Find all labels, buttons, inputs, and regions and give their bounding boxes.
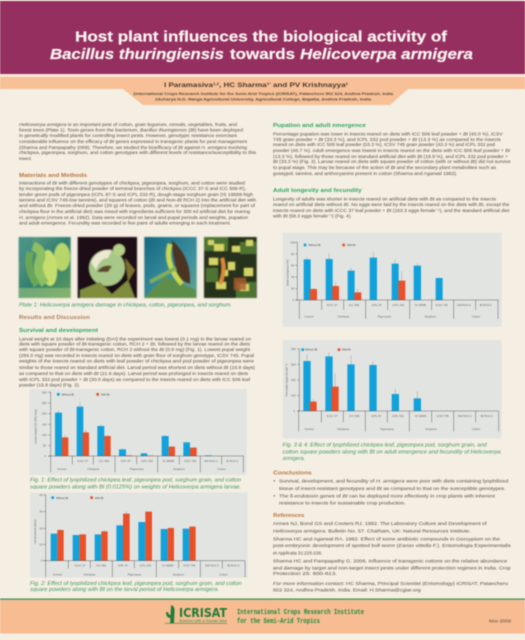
axis labels: figure 2 xyxy=(33,493,240,576)
axis labels: figure 3: 40 xyxy=(291,275,295,279)
figure 1 caption xyxy=(30,478,241,490)
axis labels: figure 4 xyxy=(284,347,493,431)
axis labels: figure 2: IS 18688 xyxy=(162,563,174,567)
survival text: with ICPL 332 pod powder + Bt (30.0 days) as compared to the insects reared on diets with ICC 506 leaf xyxy=(19,377,251,383)
tagline xyxy=(165,619,227,624)
legend: figure 4: With Bt xyxy=(342,348,351,352)
axis labels: figure 3: Pigeonpea xyxy=(378,314,392,318)
axis labels: figure 1: Bt RCH 2 xyxy=(226,459,239,463)
axis labels: figure 4: ICCC 37 xyxy=(327,414,338,418)
bars: figure 1 xyxy=(55,403,212,456)
materials and methods text: and without Bt. Freeze-dried powder (20 g) of leaves, pods, grains, or squares (replacement for part of xyxy=(19,203,256,209)
affiliations xyxy=(133,91,394,102)
tagline: Science with a human face xyxy=(179,619,227,623)
axis labels: figure 3: Control xyxy=(304,314,314,318)
legend: figure 1 xyxy=(57,392,110,396)
legend: figure 2: Without Bt xyxy=(56,496,69,500)
axis labels: figure 1: ICCC 37 xyxy=(77,459,89,463)
axis labels: figure 1: 250 xyxy=(42,401,47,405)
axis labels: figure 4: ICPL 332 xyxy=(392,414,404,418)
introduction text: in genetically modified plants for controlling insect pests. However, genotypic resistance exercises xyxy=(19,133,238,139)
authors: 1,2 xyxy=(213,82,219,86)
heading: conclusions: Conclusions xyxy=(273,470,312,476)
conclusions list: resistance to insects for sustainable crop production. xyxy=(279,500,406,506)
axis labels: figure 1: 150 xyxy=(42,422,47,426)
footer band xyxy=(0,598,525,634)
references text: et Applicata 31:225-228. xyxy=(273,550,322,556)
axis labels: figure 3 xyxy=(286,240,492,318)
survival text: weights of the insects reared on diets with leaf powder of chickpea and pod powder of pigeonpea were xyxy=(19,358,254,364)
materials and methods text: and adult emergence. Fecundity was recorded in five pairs of adults emerging in each treatment. xyxy=(19,220,231,226)
axis labels: figure 1: 50 xyxy=(43,444,46,448)
bars: figure 2 xyxy=(51,511,196,561)
chart: figure 2 larval period xyxy=(30,492,248,578)
axes and table: figure 4 xyxy=(297,349,499,432)
axis labels: figure 2: ICPL 87 xyxy=(118,563,128,567)
pupation text: Bt (33.3 %) (Fig. 3). Larvae reared on diets with square powder of cotton (with or without Bt) did not survive xyxy=(273,159,511,165)
figures 3 and 4 caption: armigera. xyxy=(283,456,305,462)
axis labels: figure 1: 300 xyxy=(42,390,47,394)
institute name: for the Semi-Arid Tropics xyxy=(237,618,320,626)
title xyxy=(50,30,473,63)
axis labels: figure 4: 100 xyxy=(291,394,296,398)
pupation text: 745 grain powder + Bt (33.3 %), and ICPL 332 pod powder + Bt (13.3 %) as compared to the insects xyxy=(273,137,501,143)
axes and table: figure 3 xyxy=(295,242,499,319)
axis labels: figure 3: IS 18688 xyxy=(415,303,426,307)
axis labels: figure 2: Control xyxy=(53,572,62,576)
survival text: powder (15.8 days) (Fig. 2). xyxy=(19,382,80,388)
survival text: (284.0 mg) was recorded in insects reared on diets with grain flour of sorghum genotype, ICSV 745. Pupal xyxy=(19,353,254,359)
axis labels: figure 4: 200 xyxy=(291,378,296,382)
figure 2 caption xyxy=(30,581,242,593)
authors: , HC Sharma xyxy=(219,82,267,89)
axis labels: figure 3: 0 xyxy=(293,298,295,302)
axis labels: figure 1: NM RCH 2 xyxy=(204,459,218,463)
axis labels: figure 2: Chickpea xyxy=(83,572,96,576)
materials and methods text xyxy=(19,180,256,226)
icon: ICRISAT plant logo xyxy=(166,605,175,623)
axis labels: figure 3: ICPL 87 xyxy=(372,303,382,307)
axis labels: figure 4: ICPL 87 xyxy=(371,414,382,418)
conclusions list: Survival, development, and fecundity of H. armigera were poor with diets containing lyophilized xyxy=(279,479,509,485)
pupation text: powder (46.7 %). Adult emergence was lowest in insects reared on the diets with ICC 506 leaf powder + Bt xyxy=(273,148,511,154)
axis labels: figure 2: ICPL 332 xyxy=(139,563,152,567)
survival text: with square powder of Bt-transgenic cotton, RCH 2 without the Bt (0.9 mg) (Fig. 1). Lowest pupal weight xyxy=(19,347,251,353)
legend: figure 4 xyxy=(301,348,351,352)
references text: Helicoverpa armigera. Bulletin No. 57. Chatham, UK: Natural Resources Institute. xyxy=(273,528,471,534)
longevity text: insects reared on diets with ICCC 37 leaf powder + Bt (153.3 eggs female⁻¹), and the standard artificial diet xyxy=(273,208,510,214)
axis labels: figure 4: Chickpea xyxy=(337,427,349,431)
heading: results and discussion: Results and Discussion xyxy=(19,315,90,321)
bars: figure 4 xyxy=(303,352,421,411)
photo: sorghum panicle with larva xyxy=(204,237,257,298)
legend: figure 2 xyxy=(51,496,104,500)
axis labels: figure 3: ICSV 745 xyxy=(436,303,448,307)
axis labels: figure 1: ICPL 87 xyxy=(121,459,131,463)
introduction text: insect. xyxy=(19,156,32,162)
axis labels: figure 2: ICC 506 xyxy=(96,563,107,567)
materials and methods text: tender green pods of pigeonpea (ICPL 87-S and ICPL 332-R), dough-stage sorghum grain (IS 18688-high xyxy=(19,192,253,198)
legend: figure 3: With Bt xyxy=(347,243,356,247)
survival text xyxy=(19,336,255,388)
figure 2 caption: Fig. 2: Effect of lyophilized chickpea leaf, pigeonpea pod, sorghum grain, and cotton xyxy=(30,581,242,587)
references text: Protection 25: 800-813. xyxy=(273,571,337,577)
axis labels: figure 4: IS 18688 xyxy=(415,414,427,418)
axis labels: figure 4: Fecundity (eggs female⁻¹) xyxy=(284,364,288,396)
pupation text: reared on diets with ICC 506 leaf powder (53.3 %), ICSV 745 grain powder (43.3 %) and ICPL 332 pod xyxy=(273,142,495,148)
introduction text: Helicoverpa armigera is an important pest of cotton, grain legumes, cereals, vegetables, fruits, and xyxy=(19,122,237,128)
heading: pupation and adult emergence: Pupation and adult emergence xyxy=(273,123,367,129)
heading: adult longevity and fecundity: Adult longevity and fecundity xyxy=(273,188,363,194)
survival text: as compared to that on diets with Bt (21.6 days). Larval period was prolonged in insects reared on diets xyxy=(19,371,249,377)
heading: survival and development: Survival and development xyxy=(19,328,98,334)
axis labels: figure 1: Control xyxy=(57,467,67,471)
axis labels: figure 3: NM RCH 2 xyxy=(457,303,471,307)
institute name xyxy=(237,609,364,626)
axis labels: figure 4: Bt RCH 2 xyxy=(481,414,493,418)
axis labels: figure 1: IS 18688 xyxy=(163,459,174,463)
conclusions list: The δ-endotoxin genes of Bt can be deployed more effectively in crop plants with inherent xyxy=(279,493,496,499)
longevity text: Longevity of adults was shorter in insects reared on artificial diets with Bt as compared to the insects xyxy=(273,196,497,202)
chart: figure 4 fecundity xyxy=(283,340,502,438)
introduction text xyxy=(19,122,257,162)
axis labels: figure 3: Bt RCH 2 xyxy=(480,303,492,307)
axis labels: figure 4: NM RCH 2 xyxy=(458,414,472,418)
axis labels: figure 4: ICC 506 xyxy=(349,414,360,418)
survival text: diets with square powder of Bt-transgenic cotton, RCH 2 + Bt, followed by the larvae reared on the diets xyxy=(19,342,251,348)
contact information: For more information contact: HC Sharma, Principal Scientist (Entomology) ICRISAT, Patancheru xyxy=(273,581,508,587)
conclusions list xyxy=(274,479,509,506)
pupation text: Percentage pupation was lower in insects reared on diets with ICC 506 leaf powder + Bt (40.0 %), ICSV xyxy=(273,132,504,138)
axis labels: figure 4: Pigeonpea xyxy=(380,427,394,431)
axis labels: figure 3: 60 xyxy=(291,263,295,267)
bars: figure 3 xyxy=(304,252,443,300)
axis labels: figure 2: 20 xyxy=(39,526,43,530)
axis labels: figure 2: 40 xyxy=(39,493,43,497)
axis labels: figure 1: Chickpea xyxy=(87,467,100,471)
introduction text: forest trees (Plate 1). Toxin genes from the bacterium, Bacillus thuringiensis (Bt) have been deployed xyxy=(19,128,243,134)
axes and table: figure 2 xyxy=(43,495,245,577)
title: Host plant influences the biological activity of xyxy=(75,30,447,46)
axis labels: figure 4: 300 xyxy=(291,362,296,366)
survival text: similar to those reared on standard artificial diet. Larval period was shortest on diets without Bt (16.8 days) xyxy=(19,365,255,371)
axis labels: figure 2: 10 xyxy=(39,542,43,546)
axis labels: figure 3: ICCC 37 xyxy=(327,303,338,307)
axis labels: figure 1: ICC 506 xyxy=(99,459,110,463)
authors: 1* xyxy=(267,82,272,86)
heading: materials and methods: Materials and Methods xyxy=(19,173,87,179)
figure 1 caption: Fig. 1: Effect of lyophilized chickpea leaf, pigeonpea pod, sorghum grain, and cotton xyxy=(30,478,241,484)
figures 3 and 4 caption: Fig. 3 & 4: Effect of lyophilized chickpea leaf, pigeonpea pod, sorghum grain, and xyxy=(283,442,488,448)
figure 2 caption: square powders along with Bt on the larval period of Helicoverpa armigera. xyxy=(30,587,219,593)
axis labels: figure 3: 80 xyxy=(291,252,295,256)
axis labels: figure 4: 0 xyxy=(294,409,296,413)
chart: figure 1 larval weight xyxy=(29,389,247,475)
axis labels: figure 2: ICSV 745 xyxy=(183,563,196,567)
conclusions list: • xyxy=(274,480,276,485)
conclusions list: tissue of insect-resistant genotypes and Bt as compared to that on the susceptible genotypes. xyxy=(279,486,506,492)
conclusions list: • xyxy=(274,494,276,499)
longevity text xyxy=(273,196,510,220)
references text: Sharma HC and Agarwal RA. 1982. Effect of some antibiotic compounds in Gossypium on the xyxy=(273,536,500,542)
axis labels: figure 1: Larval weight (10 DAI) (mg) xyxy=(34,409,38,444)
introduction text: chickpea, pigeonpea, sorghum, and cotton genotypes with different levels of resistance/susceptibility to this xyxy=(19,150,257,156)
references text: Armes NJ, Bond GS and Cooters RJ. 1992. The Laboratory Culture and Development of xyxy=(273,521,487,527)
axis labels: figure 2: 30 xyxy=(39,510,43,514)
axis labels: figure 2: Cotton xyxy=(219,572,228,576)
axis labels: figure 4: Cotton xyxy=(472,427,481,431)
materials and methods text: chickpea flour in the artificial diet) was mixed with ingredients sufficient for 300 ml artificial diet for rearing xyxy=(19,209,250,215)
heading: references: References xyxy=(273,513,304,519)
axis labels: figure 1: ICPL 332 xyxy=(141,459,153,463)
axis labels: figure 2: 0 xyxy=(41,559,43,563)
axis labels: figure 2: Larval period (days) xyxy=(33,519,37,544)
plate 1 caption: Plate 1: Helicoverpa armigera damage in chickpea, cotton, pigeonpea, and sorghum. xyxy=(19,302,232,308)
axis labels: figure 2: ICCC 37 xyxy=(75,563,86,567)
longevity text: reared on artificial diets without Bt. No eggs were laid by the insects reared on the diets with Bt, except the xyxy=(273,202,510,208)
authors: I Paramasiva xyxy=(164,82,204,89)
pupation text: to pupal stage. This may be because of the action of Bt and the secondary plant metabolites such as xyxy=(273,165,497,171)
legend: figure 1: Without Bt xyxy=(62,392,74,396)
axis labels: figure 3: Adult emergence (%) xyxy=(286,259,290,286)
authors: and PV Krishnayya xyxy=(271,82,346,89)
axis labels: figure 4: Control xyxy=(305,427,314,431)
axis labels: figure 4: ICSV 745 xyxy=(437,414,449,418)
title: Bacillus thuringiensis xyxy=(50,47,224,63)
references text: and damage by target and non-target insect pests under different protection regimes in India. Crop xyxy=(273,565,511,571)
introduction text: considerable influence on the efficacy of Bt genes expressed in transgenic plants for pest management xyxy=(19,139,248,145)
axis labels: figure 3: Chickpea xyxy=(337,314,350,318)
axis labels: figure 3: Cotton xyxy=(472,314,481,318)
axis labels: figure 2: NM RCH 2 xyxy=(205,563,219,567)
axis labels: figure 2: Pigeonpea xyxy=(128,572,142,576)
title: towards xyxy=(230,47,295,63)
axis labels: figure 1: 0 xyxy=(45,454,47,458)
ICRISAT wordmark: ICRISAT xyxy=(179,606,228,620)
contact information: 502 324, Andhra Pradesh, India. Email: H.Sharma@cgiar.org xyxy=(273,587,421,593)
axis labels: figure 1: Cotton xyxy=(217,467,226,471)
figures 3 and 4 caption: cotton square powders along with Bt on adult emergence and fecundity of Helicoverpa xyxy=(283,449,501,455)
materials and methods text: by incorporating the freeze-dried powder of terminal branches of chickpea (ICCC 37-S and ICC 506-R), xyxy=(19,186,246,192)
axis labels: figure 1: Sorghum xyxy=(173,467,185,471)
axis labels: figure 3: ICPL 332 xyxy=(392,303,405,307)
axis labels: figure 4: 400 xyxy=(291,347,296,351)
survival text: Larval weight at 10 days after initiating (DAI) the experiment was lowest (0.1 mg) in the larvae reared on xyxy=(19,336,251,342)
affiliations: 1International Crops Research Institute for the Semi-Arid Tropics (ICRISAT), Patancheru 502 324, Andhra Pradesh, India xyxy=(133,91,394,96)
legend: figure 3: Without Bt xyxy=(308,243,321,247)
axis labels: figure 4: Sorghum xyxy=(425,427,437,431)
axis labels: figure 3: 100 xyxy=(290,240,295,244)
photo: pigeonpea pod with larva xyxy=(144,237,197,298)
axis labels: figure 3: ICC 506 xyxy=(349,303,360,307)
axis labels: figure 1: 100 xyxy=(42,433,47,437)
pupation text: gossypol, tannins, and anthocyanins present in cotton (Sharma and Agarwal 1982). xyxy=(273,171,457,177)
references text: Sharma HC and Pampapathy G. 2006. Influence of transgenic cottons on the relative abundance xyxy=(273,559,508,565)
photo: chickpea pods with larva xyxy=(19,237,71,298)
header banner xyxy=(0,1,525,105)
materials and methods text: H. armigera (Armes et al. 1992). Data were recorded on larval and pupal periods and weights, pupation xyxy=(19,215,248,221)
references text: post-embryonic development of spotted boll worm ( Earias vittella F.). Entomologia Experimentalis xyxy=(273,543,511,549)
axis labels: figure 1: ICSV 745 xyxy=(184,459,196,463)
axis labels: figure 2: Bt RCH 2 xyxy=(227,563,240,567)
legend: figure 1: With Bt xyxy=(101,392,110,396)
legend: figure 3 xyxy=(304,243,356,247)
title: Helicoverpa armigera xyxy=(300,47,473,63)
axis labels: figure 3: Sorghum xyxy=(425,314,437,318)
introduction text: (Sharma and Pampapathy 2006). Therefore, we studied the bioefficacy of Bt against H. armigera involving xyxy=(19,145,247,151)
axes and table: figure 1 xyxy=(48,392,244,472)
materials and methods text: tannins and ICSV 745-low tannins), and squares of cotton ( Bt and Non-Bt RCH 2) into the artificial diet with xyxy=(19,198,256,204)
legend: figure 2: With Bt xyxy=(95,496,104,500)
contact information xyxy=(273,581,508,593)
chart: figure 3 adult emergence xyxy=(283,233,502,327)
axis labels: figure 3: 20 xyxy=(291,287,295,291)
affiliations: 2Acharya N.G. Ranga Agricultural University, Agricultural College, Bapatla, Andhra Pradesh, India. xyxy=(155,97,372,102)
axis labels: figure 2: Sorghum xyxy=(173,572,185,576)
longevity text: with Bt (58.3 eggs female⁻¹) (Fig. 4). xyxy=(273,214,352,220)
axis labels: figure 1 xyxy=(34,390,239,471)
references text xyxy=(273,521,511,577)
figure 1 caption: square powders along with Bt (0.0125%) on weights of Helicoverpa armigera larvae. xyxy=(30,484,241,490)
institute name: International Crops Research Institute xyxy=(237,609,364,617)
date: Nov 2009 xyxy=(489,618,511,624)
authors: 2 xyxy=(346,82,348,86)
photo: cotton boll damage xyxy=(78,237,137,298)
pupation text: (13.3 %), followed by those reared on standard artificial diet with Bt (18.9 %), and ICPL 332 pod powder + xyxy=(273,154,508,160)
axis labels: figure 1: Pigeonpea xyxy=(130,467,144,471)
axis labels: figure 1: 200 xyxy=(42,412,47,416)
pupation text xyxy=(273,132,511,177)
legend: figure 4: Without Bt xyxy=(305,348,318,352)
figures 3 and 4 caption xyxy=(283,442,501,462)
materials and methods text: Interactions of Bt with different genotypes of chickpea, pigeonpea, sorghum, and cotton were studied xyxy=(19,180,245,186)
